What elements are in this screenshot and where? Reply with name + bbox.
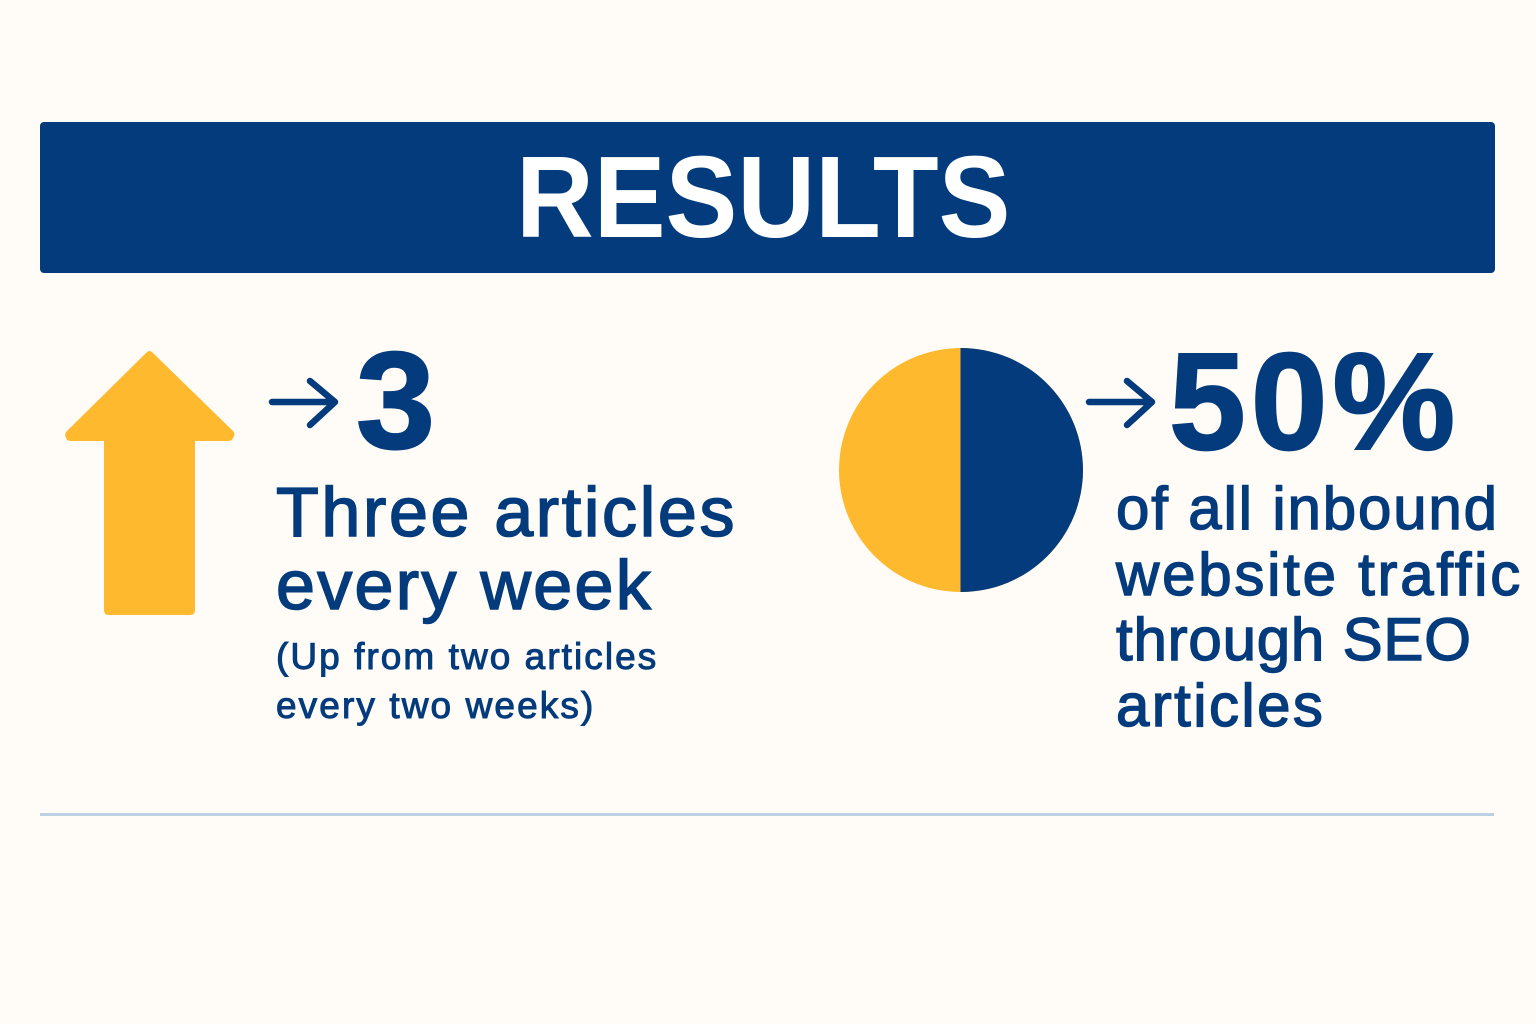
text: three articles every week: Three articles xyxy=(276,473,737,551)
text: inbound traffic description: website traffic xyxy=(1116,540,1523,608)
stat: 50 percent: 50% xyxy=(1169,325,1460,479)
divider xyxy=(40,813,1494,816)
text: up from two articles: every two weeks) xyxy=(276,685,595,726)
text: three articles every week: every week xyxy=(276,546,653,624)
text: inbound traffic description xyxy=(1115,475,1523,738)
title: RESULTS xyxy=(516,132,1010,262)
text: up from two articles: (Up from two articles xyxy=(276,636,658,677)
arrow: right stat xyxy=(1086,378,1156,428)
icon: up arrow xyxy=(65,351,234,615)
text: inbound traffic description: articles xyxy=(1116,672,1325,738)
text: inbound traffic description: through SEO xyxy=(1116,606,1472,673)
title banner xyxy=(40,122,1495,273)
text: inbound traffic description: of all inbound xyxy=(1116,475,1499,542)
text: three articles every week xyxy=(276,473,737,624)
arrow: left stat xyxy=(268,378,338,428)
text: up from two articles xyxy=(276,636,658,726)
stat: 3: 3 xyxy=(356,324,435,478)
pie chart: 50 percent xyxy=(839,348,1083,592)
